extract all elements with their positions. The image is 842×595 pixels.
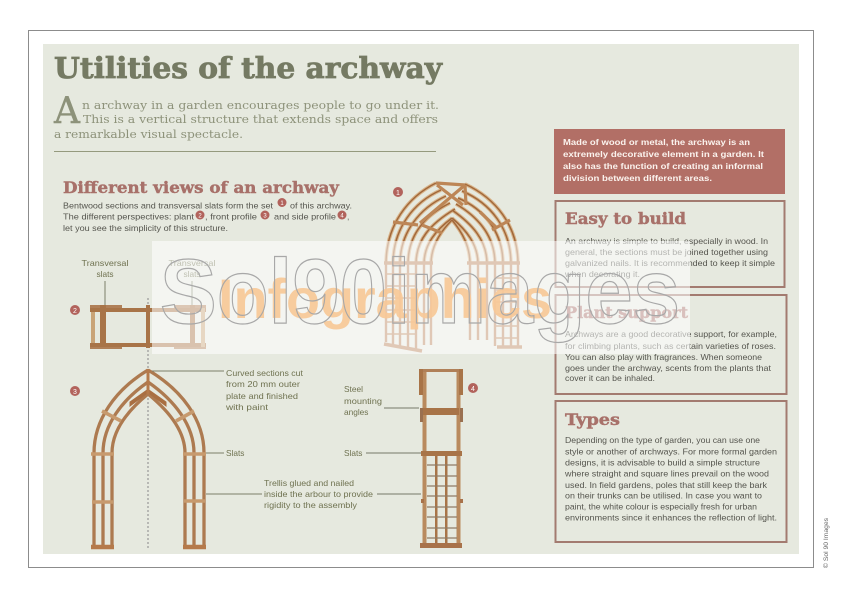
badge 2 — [70, 305, 80, 315]
views description: , front profile — [205, 212, 257, 222]
title: Utilities of the archway — [54, 51, 443, 85]
body: easy to build — [564, 236, 775, 279]
body: types: style or another of archways. For more formal garden — [565, 446, 777, 456]
body: plant support: Archways are a good decorative support, for example, — [565, 329, 777, 339]
leader lines — [152, 371, 262, 494]
body: types: Depending on the type of garden, you can use one — [565, 435, 760, 445]
plan drawing — [90, 298, 206, 550]
intro text: a remarkable visual spectacle. — [54, 128, 243, 141]
watermark: sol90images: Sol90images — [160, 241, 680, 343]
body: plant support: goes under the archway, scents from the plants that — [565, 363, 772, 373]
arch ribs — [386, 183, 518, 264]
callout: intro: also has the function of creating an informal — [563, 161, 763, 171]
heading: different views: Different views of an archway — [63, 178, 340, 197]
views description: 4 — [340, 214, 344, 220]
heading: types: Types — [565, 410, 620, 429]
credit: © Sol 90 Images — [822, 517, 830, 568]
panel: plant support — [556, 295, 786, 394]
label: curved sections: from 20 mm outer — [226, 379, 300, 389]
perspective view of archway — [384, 183, 522, 351]
heading: plant support: Plant support — [565, 303, 689, 322]
label: steel angles: angles — [344, 407, 368, 417]
views description: 2 — [198, 214, 202, 220]
body: types: designs, it is advisable to build a simple structure — [565, 458, 760, 468]
badge 4: 4 — [471, 386, 475, 393]
badge 3: 3 — [73, 389, 77, 396]
badge 2: 2 — [73, 308, 77, 315]
views description — [63, 198, 352, 233]
label: curved sections: plate and finished — [226, 391, 298, 401]
intro text: n archway in a garden encourages people to go under it. — [82, 99, 439, 112]
views description: The different perspectives: plant — [63, 212, 195, 222]
views description: let you see the simplicity of this structure. — [63, 223, 228, 233]
label: trellis: inside the arbour to provide — [264, 489, 373, 499]
body: plant support — [565, 329, 777, 383]
views description: Bentwood sections and transversal slats form the set — [63, 200, 274, 210]
panel: types — [556, 401, 786, 542]
callout: intro: extremely decorative element in a garden. It — [563, 149, 764, 159]
badge 3 — [70, 386, 80, 396]
intro text — [53, 91, 439, 141]
label: steel angles: mounting — [344, 396, 382, 406]
side drawing — [419, 369, 463, 548]
label: steel angles: Steel — [344, 384, 363, 394]
label: trellis: rigidity to the assembly — [264, 500, 358, 510]
body: easy to build: galvanized nails. It is recommended to keep it simple — [565, 258, 775, 268]
heading: easy to build: Easy to build — [565, 209, 686, 228]
transversal slats label left: Transversal — [82, 258, 129, 268]
transversal slats label right: Transversal — [168, 258, 216, 268]
body: easy to build: An archway is simple to build, especially in wood. In — [565, 236, 768, 246]
transversal slats label left — [82, 258, 129, 279]
body: easy to build: when decorating it. — [564, 269, 640, 279]
body: types: paint, the white colour is especially fresh for urban — [565, 502, 757, 512]
views description: and side profile — [274, 212, 336, 222]
background panel — [43, 44, 799, 554]
body: types: environments since it enhances the reflection of light. — [565, 512, 777, 522]
label: steel angles — [344, 384, 382, 417]
callout: intro: Made of wood or metal, the archway is an — [563, 137, 750, 147]
body: plant support: You can also play with fragrances. When someone — [565, 352, 762, 362]
label: trellis: Trellis glued and nailed — [264, 478, 354, 488]
intro text: A — [53, 91, 81, 132]
badge 4 — [468, 383, 478, 393]
transversal slats label right: slats — [183, 269, 201, 279]
body: types: where straight and square lines prevail on the wood — [564, 468, 769, 478]
transversal slats label left: slats — [96, 269, 114, 279]
label: curved sections: with paint — [225, 402, 269, 412]
plant view — [70, 258, 216, 550]
body: types: used. In field gardens, poles that still keep the bark — [565, 480, 768, 490]
watermark — [152, 241, 690, 354]
front arch drawing — [91, 369, 206, 548]
callout: intro — [554, 129, 785, 194]
watermark: infographics: Infographics — [218, 267, 552, 330]
legs and trellis — [384, 262, 522, 351]
label: trellis — [264, 478, 373, 510]
badge 1: 1 — [396, 190, 400, 197]
label: slats side: Slats — [344, 448, 362, 458]
label: curved sections — [225, 368, 304, 412]
body: types — [564, 435, 777, 522]
label: slats: Slats — [226, 448, 244, 458]
views description: 1 — [280, 201, 284, 207]
callout: intro: division between different areas. — [563, 173, 712, 183]
badge 1 — [393, 187, 403, 197]
side leader lines — [366, 408, 421, 494]
front view — [70, 368, 373, 548]
label: curved sections: Curved sections cut — [226, 368, 304, 378]
intro text: This is a vertical structure that extends space and offers — [83, 113, 438, 126]
body: types: on their trunks can be utilised. In case you want to — [565, 490, 762, 500]
views description: 3 — [263, 214, 267, 220]
body: plant support: for climbing plants, such as certain varieties of roses. — [565, 341, 776, 351]
side view — [344, 369, 478, 548]
cross slats — [393, 183, 510, 233]
body: plant support: cover it can be inhaled. — [565, 373, 655, 383]
body: easy to build: general, the sections must be joined together using — [565, 247, 768, 257]
panel: easy to build — [556, 201, 784, 287]
views description: of this archway. — [290, 200, 352, 210]
transversal slats label right — [168, 258, 216, 279]
views description: , — [347, 212, 349, 222]
